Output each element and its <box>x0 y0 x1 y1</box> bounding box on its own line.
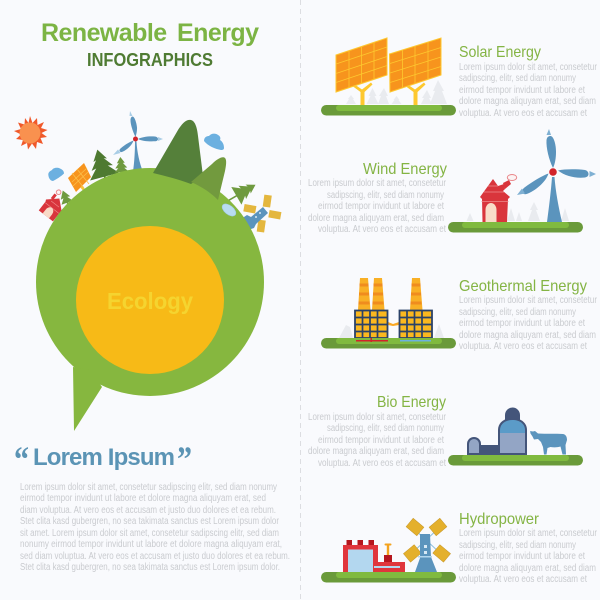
ground <box>321 338 456 348</box>
text block: left paragraph: eirmod tempor invidunt ut labore et dolore magna aliquyam erat, sed <box>20 493 266 504</box>
icon: connector pipe <box>388 322 399 326</box>
text block: left paragraph: diam voluptua. At vero eos et accusam et justo duo dolores et ea rebum. <box>20 505 276 516</box>
text block: wind energy: sadipscing, elitr, sed diam nonumy <box>327 190 444 201</box>
icon: cloud left <box>48 168 64 181</box>
icon: small house on globe <box>38 187 71 222</box>
icon: dam building <box>343 540 405 572</box>
text block: wind energy: Lorem ipsum dolor sit amet, consetetur <box>308 178 447 189</box>
heading: hydropower: Hydropower <box>459 511 540 528</box>
text block: left paragraph <box>20 482 290 573</box>
text block: bio energy: voluptua. At vero eos et accusam et <box>318 458 446 469</box>
icon: heat exchanger right <box>400 310 432 338</box>
text block: left paragraph: sit amet. Lorem ipsum dolor sit amet, consetetur sadipscing elitr, sed diam <box>20 528 279 539</box>
text block: geothermal energy <box>459 295 598 352</box>
text block: left paragraph: sed diam voluptua. At vero eos et accusam et justo duo dolores et ea rebum. <box>20 551 290 562</box>
ground <box>321 105 456 116</box>
background ghost trees <box>466 202 569 221</box>
icon: sun <box>14 116 48 150</box>
text block: bio energy: Lorem ipsum dolor sit amet, consetetur <box>308 412 447 423</box>
heading: solar energy: Solar Energy <box>459 44 541 61</box>
text block: left paragraph: Stet clita kasd gubergren, no sea takimata sanctus est Lorem ipsum dolor. <box>20 562 280 573</box>
text block: left paragraph: nonumy eirmod tempor invidunt ut labore et dolore magna aliquyam erat, <box>20 539 282 550</box>
text block: hydropower <box>459 528 598 585</box>
icon: house <box>480 174 517 222</box>
ground <box>321 572 456 582</box>
icon: big tree <box>83 146 122 191</box>
icon: small tree left <box>57 188 75 209</box>
background ghost trees <box>346 80 447 104</box>
solar panel right <box>390 38 441 92</box>
heading: geothermal energy: Geothermal Energy <box>459 278 587 295</box>
text block: wind energy <box>308 178 447 235</box>
solar panel supports <box>351 82 426 105</box>
icon: water windmill <box>403 518 451 572</box>
panel: bio energy <box>448 408 583 466</box>
icon: small solar panel <box>68 163 91 192</box>
icon: heat exchanger left <box>355 310 388 338</box>
icon: biogas plant <box>467 408 527 455</box>
solar panel left <box>336 38 387 92</box>
icon: windmill on globe <box>241 195 281 232</box>
text block: wind energy: eirmod tempor invidunt ut labore et <box>318 201 444 212</box>
heading: bio energy: Bio Energy <box>377 394 446 411</box>
panel: geothermal energy <box>321 278 456 348</box>
panel: wind energy <box>448 129 596 232</box>
icon: pond <box>220 202 238 218</box>
icon: cow <box>530 430 567 454</box>
text block: wind energy: dolore magna aliquyam erat, sed diam <box>308 213 444 224</box>
quote heading: ” <box>177 439 192 479</box>
title <box>41 19 259 70</box>
text block: solar energy <box>459 62 598 119</box>
icon: medium tree <box>113 156 129 178</box>
icon: right tree <box>223 176 261 209</box>
text block: wind energy: voluptua. At vero eos et accusam et <box>318 224 446 235</box>
label: Ecology: Ecology <box>107 288 193 314</box>
ground <box>448 222 583 232</box>
text block: left paragraph: Stet clita kasd gubergren, no sea takimata sanctus est Lorem ipsum dolor <box>20 516 280 527</box>
title: INFOGRAPHICS <box>87 50 213 70</box>
text block: bio energy <box>308 412 447 469</box>
quote heading: Lorem Ipsum <box>33 444 175 471</box>
globe speech bubble <box>36 168 264 431</box>
text block: bio energy: dolore magna aliquyam erat, sed diam <box>308 446 444 457</box>
panel: hydropower <box>321 518 456 582</box>
panel: solar energy <box>321 38 456 116</box>
background ghost trees <box>339 324 444 338</box>
text block: left paragraph: Lorem ipsum dolor sit amet, consetetur sadipscing elitr, sed diam nonumy <box>20 482 277 493</box>
quote heading: “ <box>14 439 29 479</box>
icon: small mountain <box>191 157 226 200</box>
heading: wind energy: Wind Energy <box>363 161 447 178</box>
ground <box>448 455 583 466</box>
icon: globe wind turbine <box>113 111 163 173</box>
icon: big mountain <box>153 120 203 184</box>
text block: bio energy: eirmod tempor invidunt ut labore et <box>318 435 444 446</box>
text block: bio energy: sadipscing, elitr, sed diam nonumy <box>327 423 444 434</box>
title: Renewable Energy <box>41 19 259 47</box>
center circle <box>76 226 224 374</box>
quote heading <box>14 439 192 479</box>
icon: cloud right <box>204 134 224 150</box>
icon: cooling towers <box>358 278 422 310</box>
icon: wind turbine <box>517 129 596 222</box>
